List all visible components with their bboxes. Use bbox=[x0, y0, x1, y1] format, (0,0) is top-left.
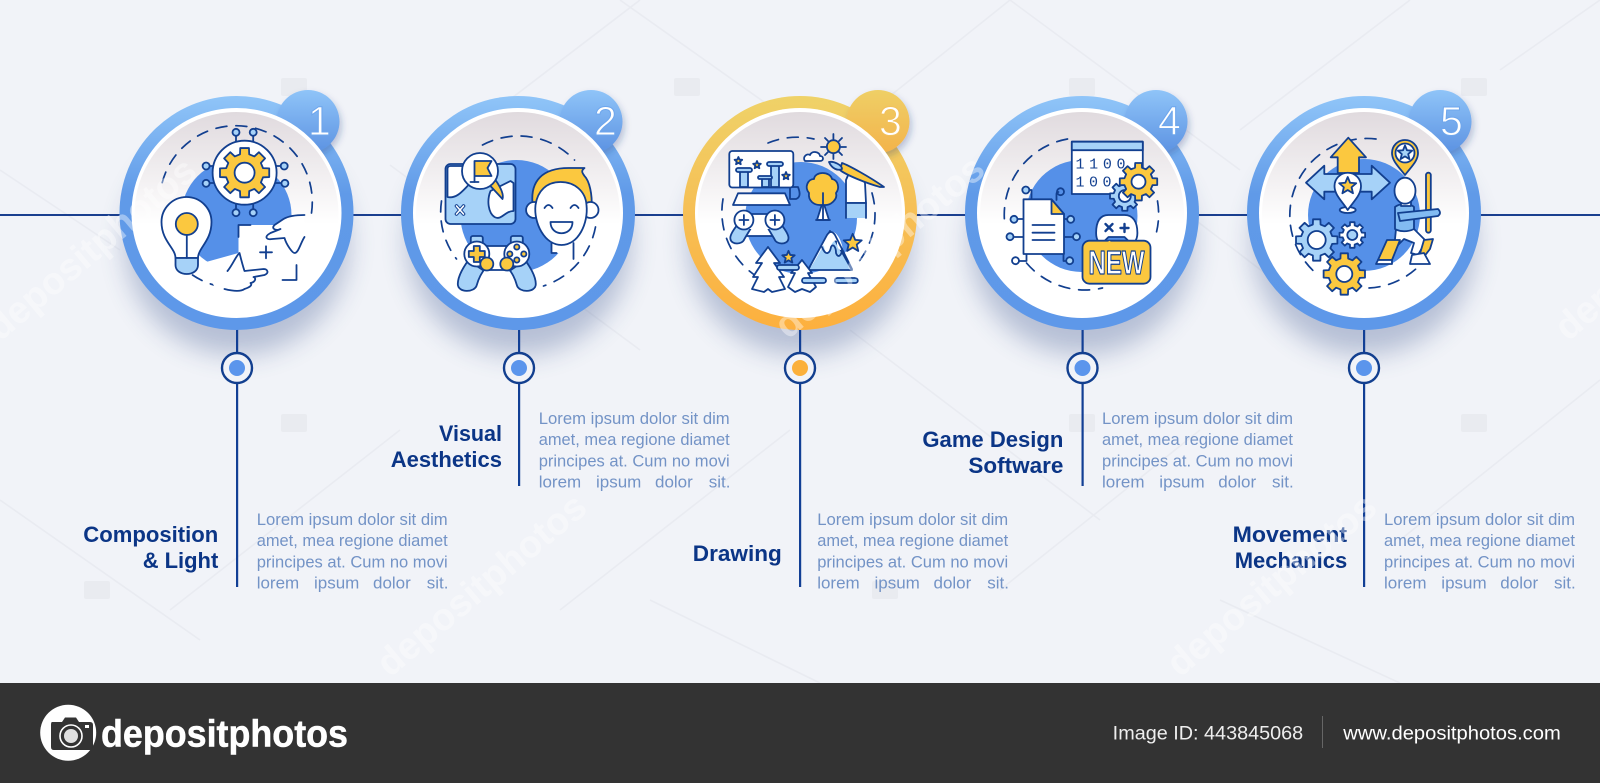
body text 4: Lorem ipsum dolor sit dim bbox=[1102, 409, 1293, 428]
number 5: 5 bbox=[1440, 98, 1463, 144]
body text 3: ipsum bbox=[875, 574, 920, 592]
inner disc 1 bbox=[132, 108, 342, 318]
body text 2: dolor bbox=[655, 472, 693, 492]
connector 1 bbox=[222, 325, 252, 587]
heading: composition and light: & Light bbox=[143, 548, 219, 573]
connector 5 bbox=[1349, 325, 1379, 587]
heading: visual aesthetics: Aesthetics bbox=[391, 447, 502, 472]
icon: code window, document, gears, new gamepad: NEW bbox=[1088, 244, 1145, 281]
watermark text bbox=[0, 148, 1600, 685]
connector 3 bbox=[785, 325, 815, 587]
body text 5: principes at. Cum no movi bbox=[1384, 552, 1575, 572]
body text 3: dolor bbox=[934, 574, 972, 592]
panel: step 5 movement mechanics bbox=[1233, 90, 1576, 592]
body text 2: ipsum bbox=[596, 472, 641, 492]
icon: code window, document, gears, new gamepad bbox=[1004, 139, 1159, 290]
icon: lightbulb, gear, framing hands bbox=[160, 126, 312, 295]
icon: code window, document, gears, new gamepad: 100 bbox=[1076, 175, 1112, 192]
heading: game design software: Game Design bbox=[922, 427, 1063, 452]
number 3: 3 bbox=[879, 98, 902, 144]
number 2: 2 bbox=[594, 98, 617, 144]
watermark text: depositphotos bbox=[1159, 486, 1385, 685]
body text 2: Lorem ipsum dolor sit dim bbox=[539, 409, 730, 428]
icon: camera logo bbox=[40, 705, 96, 761]
body text 3: lorem bbox=[817, 574, 860, 592]
body text 1: Lorem ipsum dolor sit dim bbox=[257, 510, 448, 529]
ring 2 bbox=[401, 96, 635, 330]
badge 1 bbox=[276, 90, 340, 153]
icon: game level, tree, brush, mountain bbox=[722, 134, 884, 292]
body text 1: principes at. Cum no movi bbox=[257, 552, 448, 572]
badge 3 bbox=[846, 90, 910, 153]
body text 2: sit. bbox=[709, 472, 730, 492]
inner disc 4 bbox=[977, 108, 1187, 318]
image id: Image ID: 443845068 bbox=[1113, 723, 1303, 744]
body text 4: lorem bbox=[1102, 472, 1145, 492]
heading: visual aesthetics: Visual bbox=[439, 421, 502, 446]
body text 2 bbox=[539, 409, 730, 492]
connector 4 bbox=[1068, 325, 1098, 486]
body text 3: principes at. Cum no movi bbox=[817, 552, 1008, 572]
body text 5: ipsum bbox=[1441, 574, 1487, 592]
body text 3: sit. bbox=[987, 574, 1009, 592]
heading: game design software: Software bbox=[968, 453, 1063, 478]
badge 5 bbox=[1408, 90, 1472, 153]
footer bar bbox=[0, 683, 1600, 783]
body text 5: sit. bbox=[1554, 574, 1576, 592]
logo wordmark: depositphotos bbox=[101, 714, 348, 756]
number 1: 1 bbox=[308, 98, 331, 144]
body text 4: principes at. Cum no movi bbox=[1102, 452, 1293, 470]
icon: arrows, pins, gears, figure bbox=[1290, 138, 1440, 295]
inner disc 2 bbox=[413, 108, 623, 318]
body text 5: dolor bbox=[1500, 574, 1538, 592]
heading: composition and light: Composition bbox=[83, 522, 218, 547]
connector 2 bbox=[504, 325, 534, 486]
panel: step 3 drawing bbox=[683, 90, 1009, 592]
body text 4: amet, mea regione diamet bbox=[1102, 430, 1293, 449]
heading: movement mechanics: Movement bbox=[1233, 522, 1348, 547]
body text 5: amet, mea regione diamet bbox=[1384, 531, 1575, 550]
heading: visual aesthetics bbox=[391, 421, 502, 472]
body text 2: amet, mea regione diamet bbox=[539, 430, 730, 449]
watermark cameras bbox=[84, 78, 1487, 599]
body text 3: amet, mea regione diamet bbox=[817, 531, 1008, 550]
heading: game design software bbox=[922, 427, 1063, 478]
heading: movement mechanics bbox=[1233, 522, 1348, 573]
horizontal timeline line bbox=[0, 214, 1600, 216]
number 4: 4 bbox=[1158, 98, 1181, 144]
ring 5 bbox=[1247, 96, 1481, 330]
body text 3 bbox=[817, 510, 1009, 592]
body text 4 bbox=[1102, 409, 1294, 492]
inner disc 5 bbox=[1259, 108, 1469, 318]
body text 4: ipsum bbox=[1159, 472, 1205, 492]
heading: composition and light bbox=[83, 522, 219, 573]
body text 1: lorem bbox=[257, 574, 299, 592]
body text 1: amet, mea regione diamet bbox=[257, 531, 448, 550]
panel: step 1 composition and light bbox=[83, 90, 448, 592]
body text 4: dolor bbox=[1218, 472, 1256, 492]
ring 4 bbox=[965, 96, 1199, 330]
body text 5: lorem bbox=[1384, 574, 1427, 592]
body text 2: lorem bbox=[539, 472, 581, 492]
heading: drawing: Drawing bbox=[693, 541, 782, 566]
panel: step 2 visual aesthetics bbox=[391, 90, 730, 492]
badge 2 bbox=[560, 90, 622, 153]
body text 5: Lorem ipsum dolor sit dim bbox=[1384, 510, 1575, 529]
body text 1 bbox=[257, 510, 448, 592]
body text 4: sit. bbox=[1272, 472, 1294, 492]
body text 3: Lorem ipsum dolor sit dim bbox=[817, 510, 1008, 529]
body text 5 bbox=[1384, 510, 1576, 592]
icon: code window, document, gears, new gamepad: 1100 bbox=[1076, 156, 1126, 173]
body text 1: dolor bbox=[373, 574, 411, 592]
ring 1 bbox=[120, 96, 354, 330]
body text 1: ipsum bbox=[314, 574, 359, 592]
body text 2: principes at. Cum no movi bbox=[539, 452, 730, 470]
panel: step 4 game design software bbox=[922, 90, 1294, 492]
heading: movement mechanics: Mechanics bbox=[1235, 548, 1347, 573]
body text 1: sit. bbox=[427, 574, 448, 592]
website url: www.depositphotos.com bbox=[1342, 723, 1561, 744]
icon: map, face, gamepad bbox=[441, 136, 598, 291]
ring 3 bbox=[683, 96, 917, 330]
watermark text: depositphotos bbox=[369, 486, 595, 685]
inner disc 3 bbox=[695, 108, 905, 318]
badge 4 bbox=[1124, 90, 1188, 153]
watermark text: depositphotos bbox=[767, 148, 993, 347]
